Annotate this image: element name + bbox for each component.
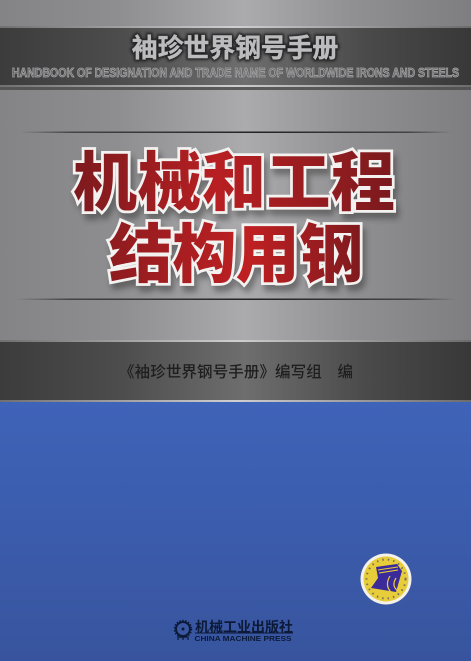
main title (73, 147, 398, 297)
title line 1: 机械和工程 (73, 147, 395, 219)
title line 2: 结构用钢 (109, 219, 363, 291)
publisher logo (174, 617, 293, 643)
publisher underline (195, 632, 293, 634)
publisher English name: CHINA MACHINE PRESS (194, 634, 292, 643)
series title: 袖珍世界钢号手册 (132, 33, 338, 63)
panel: metallic grey background (0, 0, 471, 405)
title line 1: 机械和工程 (73, 147, 395, 219)
panel: top dark band (0, 26, 471, 90)
series title: 袖珍世界钢号手册 (132, 33, 338, 63)
icon: gear (174, 620, 192, 640)
title line 1: 机械和工程 (76, 153, 398, 225)
title line 2: 结构用钢 (109, 219, 363, 291)
icon: prize seal (360, 554, 412, 604)
divider rule lower (16, 298, 456, 300)
divider rule upper (20, 132, 452, 133)
panel: lower dark band (0, 340, 471, 402)
panel: blue lower block (0, 402, 471, 661)
title line 2: 结构用钢 (112, 225, 366, 297)
editor credit: 《袖珍世界钢号手册》编写组 编 (119, 360, 353, 382)
publisher name: 机械工业出版社 (195, 617, 293, 637)
